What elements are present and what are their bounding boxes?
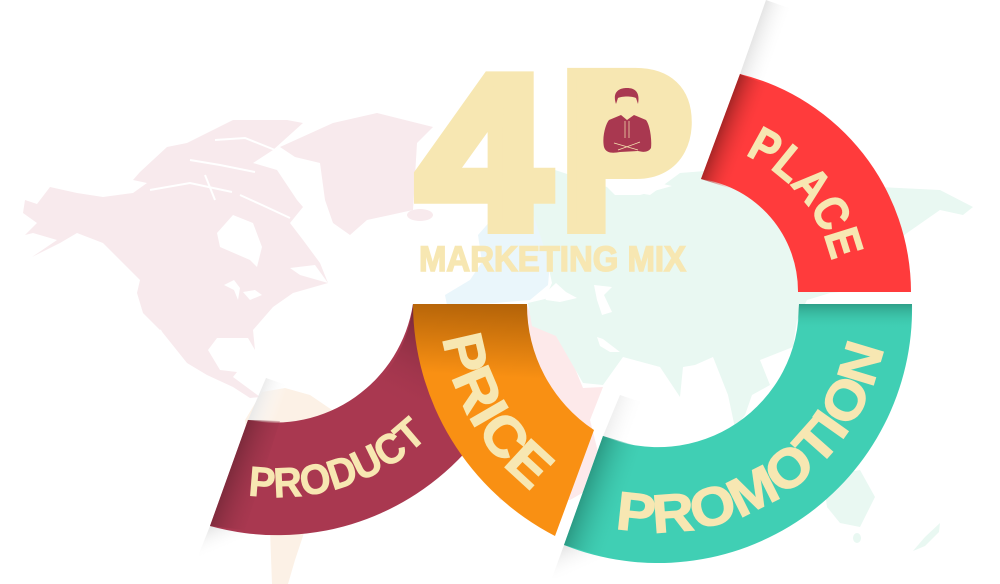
world map background bbox=[23, 113, 973, 584]
map: hudson bay and lakes bbox=[217, 215, 328, 300]
segment: promotion bbox=[564, 304, 912, 563]
map: greenland and iceland bbox=[280, 113, 433, 235]
segment: product bbox=[210, 304, 462, 536]
fold shadows bbox=[198, 0, 800, 584]
place band bbox=[701, 74, 911, 292]
product band bbox=[210, 304, 470, 535]
map: south america bbox=[245, 388, 370, 584]
tie and arms bbox=[614, 121, 640, 150]
P bowl fill bbox=[600, 80, 670, 175]
map: africa bbox=[440, 305, 605, 500]
map: north america bbox=[23, 120, 328, 398]
price band bbox=[413, 304, 594, 536]
map: seas bbox=[543, 181, 672, 352]
subtitle: marketing mix: MARKETING MIX bbox=[419, 240, 687, 279]
body bbox=[603, 115, 651, 153]
map: asia bbox=[528, 165, 973, 428]
place label: PLACE bbox=[747, 126, 864, 260]
big letter P: P bbox=[558, 24, 694, 277]
price label: PRICE bbox=[442, 332, 556, 491]
segment: place bbox=[701, 74, 911, 292]
product label: PRODUCT bbox=[250, 415, 422, 498]
map: australia and new zealand bbox=[823, 470, 940, 551]
promotion band bbox=[564, 304, 912, 563]
icon: businessman with crossed arms bbox=[603, 88, 651, 153]
big numeral 4: 4 bbox=[418, 31, 549, 273]
title: 4P bbox=[418, 24, 694, 277]
segment: price bbox=[413, 304, 594, 536]
hair bbox=[615, 88, 639, 104]
map: europe bbox=[445, 200, 552, 305]
promotion label: PROMOTION bbox=[618, 340, 884, 534]
